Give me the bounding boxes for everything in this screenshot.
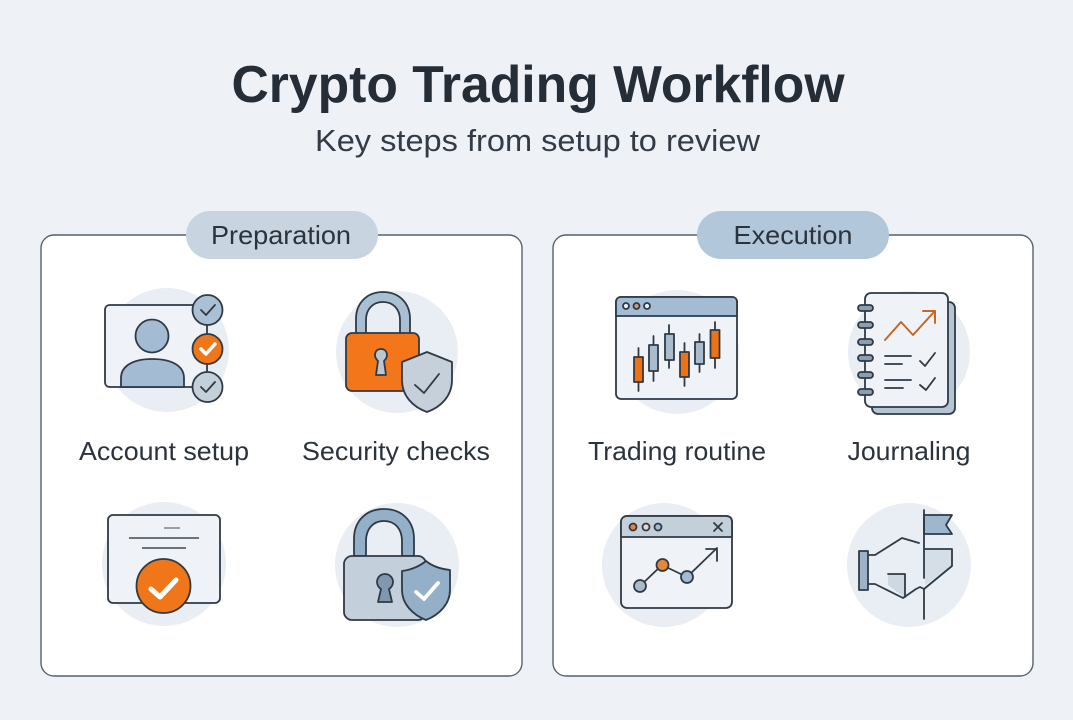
- subtitle: Key steps from setup to review: [315, 123, 761, 158]
- panel: preparation: [41, 211, 522, 676]
- pill heading: preparation: Preparation: [211, 220, 351, 250]
- icon: account setup: [105, 288, 229, 412]
- label: journaling: Journaling: [848, 436, 970, 466]
- title: Crypto Trading Workflow: [232, 56, 845, 114]
- icon: browser with line chart: [602, 503, 732, 627]
- pill heading: execution: [697, 211, 889, 259]
- icon: grey lock with shield: [335, 503, 459, 627]
- icon: security checks: [336, 291, 458, 413]
- icon: trading routine candlesticks: [615, 290, 739, 414]
- icon: document with check: [102, 502, 226, 626]
- label: account setup: Account setup: [79, 436, 249, 466]
- icon: journal: [848, 291, 970, 414]
- pill heading: execution: Execution: [734, 220, 852, 250]
- label: trading routine: Trading routine: [588, 436, 766, 466]
- icon: hand and flag: [847, 503, 971, 627]
- label: security checks: Security checks: [302, 436, 490, 466]
- panel: execution: [553, 211, 1033, 676]
- pill heading: preparation: [186, 211, 378, 259]
